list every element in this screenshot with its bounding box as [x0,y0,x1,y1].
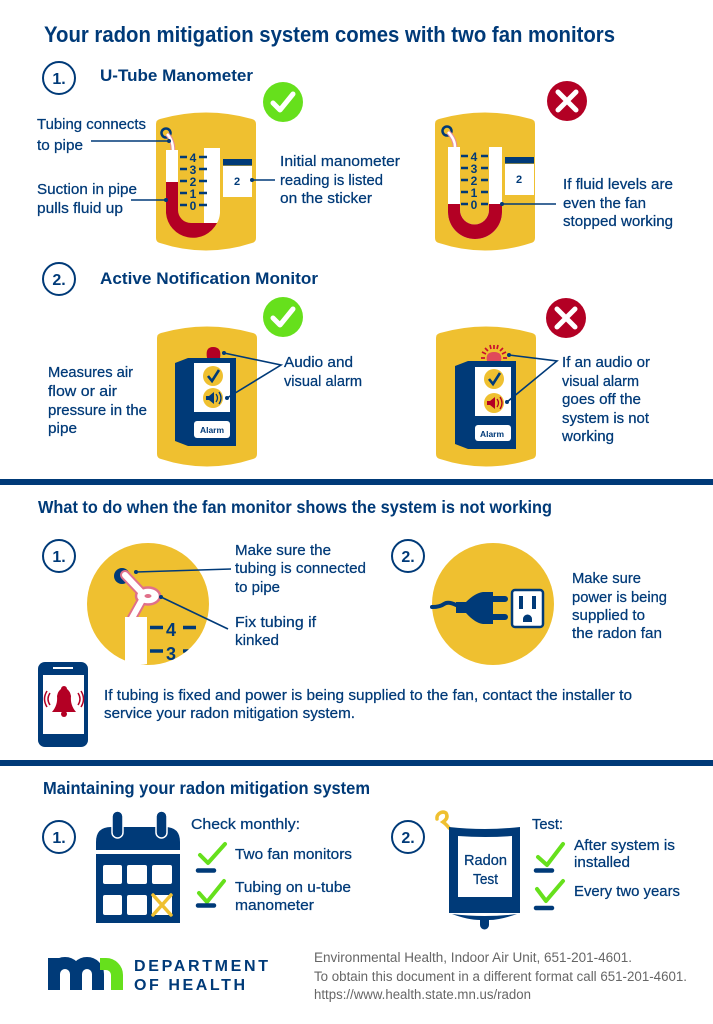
illustration: plug and outlet [432,543,554,665]
text: make sure power is supplied [572,570,667,642]
text: make sure power is supplied: supplied to [572,607,645,624]
step 2 number: 2. [401,549,415,566]
callout: suction: pulls fluid up [37,200,123,217]
heading: what to do: What to do when the fan monitor shows the system is not working [38,497,552,517]
checklist: check monthly: Tubing on u-tube [235,879,351,896]
monitor alarming [436,326,536,466]
illustration: tubing close-up [87,543,209,665]
callout: initial reading [250,153,400,207]
text: measures air flow: pipe [48,420,77,437]
section: u-tube manometer heading [43,62,253,94]
step 1 number: 1. [52,549,66,566]
manometer working [156,112,256,250]
icon: radon test kit: Test [473,871,499,888]
manometer stopped: 0 [471,198,478,212]
callout: initial reading: Initial manometer [280,153,400,170]
callout: if an audio or visual alarm: system is not [562,410,650,427]
logo: department of health: OF HEALTH [134,977,245,994]
icon: calendar [96,811,180,923]
callout: if an audio or visual alarm: working [561,428,614,445]
callout: fix tubing if kinked: kinked [235,632,279,649]
illustration: tubing close-up: 3 [166,644,176,664]
checklist: test: Every two years [574,883,680,900]
icon: radon test kit: Radon [464,852,507,869]
icon: green check good state [263,297,303,337]
checklist: check monthly: manometer [235,897,314,914]
manometer working: 2 [234,176,240,188]
callout: tubing connects [37,116,171,154]
text: make sure power is supplied: power is being [572,589,667,606]
section: active notification monitor heading [43,263,318,295]
checklist: check monthly: Two fan monitors [235,846,352,863]
text: make sure power is supplied: Make sure [572,570,641,587]
text: contact the installer: If tubing is fixed and power is being supplied to the fan, contact the installer to [104,687,632,704]
illustration: tubing close-up: 4 [166,620,176,640]
section: u-tube manometer heading: 1. [52,71,66,88]
logo: department of health [48,958,268,994]
callout: make sure tubing is connected: tubing is connected [235,560,366,577]
checklist: check monthly [191,816,352,914]
step 1 number [43,821,75,853]
footer contact text: To obtain this document in a different format call 651-201-4601. [314,969,687,984]
manometer stopped: 4 [471,150,478,164]
footer contact text: https://www.health.state.mn.us/radon [314,987,531,1002]
callout: audio and visual alarm [222,351,362,400]
callout: make sure tubing is connected [134,542,366,596]
callout: initial reading: reading is listed [280,172,383,189]
callout: initial reading: on the sticker [280,190,372,207]
manometer working: 4 [190,151,197,165]
checklist: test: After system is [574,837,675,854]
callout: make sure tubing is connected: Make sure the [235,542,331,559]
callout: tubing connects: Tubing connects [37,116,146,133]
callout: suction: Suction in pipe [37,181,137,198]
heading: maintaining: Maintaining your radon mitigation system [43,778,370,798]
manometer stopped: 3 [471,162,478,176]
icon: phone with bell [38,662,88,747]
text: measures air flow: pressure in the [48,402,147,419]
callout: fluid levels even: stopped working [563,213,673,230]
checklist: test [532,816,680,908]
step 2 number [392,821,424,853]
manometer working: 3 [190,163,197,177]
callout: if an audio or visual alarm [505,353,650,445]
manometer stopped: 1 [471,186,478,200]
icon: red x bad state [546,298,586,338]
callout: fix tubing if kinked: Fix tubing if [235,614,317,631]
manometer stopped: 2 [471,174,478,188]
text: make sure power is supplied: the radon fan [572,625,662,642]
callout: tubing connects: to pipe [37,137,83,154]
step 1 number [43,540,75,572]
callout: audio and visual alarm: Audio and [284,354,353,371]
callout: fix tubing if kinked [159,595,317,649]
section: u-tube manometer heading: U-Tube Manometer [100,66,253,85]
step 2 number: 2. [401,830,415,847]
logo: department of health: DEPARTMENT [134,958,268,975]
callout: suction [37,181,168,217]
icon: radon test kit [437,812,520,930]
manometer working: 0 [190,199,197,213]
icon: red x bad state [547,81,587,121]
callout: fluid levels even: even the fan [563,195,646,212]
monitor alarming: Alarm [480,429,504,439]
checklist: check monthly: Check monthly: [191,816,300,833]
callout: fluid levels even: If fluid levels are [563,176,673,193]
callout: if an audio or visual alarm: If an audio or [562,354,650,371]
monitor normal: Alarm [200,425,224,435]
checklist: test: installed [574,854,630,871]
monitor normal [157,326,257,466]
manometer working: 1 [190,187,197,201]
title: Your radon mitigation system comes with two fan monitors [44,22,615,47]
section: active notification monitor heading: 2. [52,272,66,289]
section: active notification monitor heading: Active Notification Monitor [100,269,318,288]
text: measures air flow: Measures air [48,364,133,381]
manometer stopped [435,112,535,250]
footer contact text: Environmental Health, Indoor Air Unit, 651-201-4601. [314,950,632,965]
callout: if an audio or visual alarm: visual alarm [562,373,639,390]
callout: fluid levels even [500,176,673,230]
manometer working: 2 [190,175,197,189]
callout: if an audio or visual alarm: goes off the [562,391,641,408]
step 1 number: 1. [52,830,66,847]
step 2 number [392,540,424,572]
text: contact the installer: service your radon mitigation system. [104,705,355,722]
text: measures air flow: flow or air [48,383,117,400]
callout: make sure tubing is connected: to pipe [235,579,280,596]
footer contact text [314,950,687,1002]
callout: audio and visual alarm: visual alarm [284,373,362,390]
icon: green check good state [263,82,303,122]
text: contact the installer [104,687,632,722]
checklist: test: Test: [532,816,563,833]
manometer stopped: 2 [516,174,522,186]
text: measures air flow [48,364,147,437]
